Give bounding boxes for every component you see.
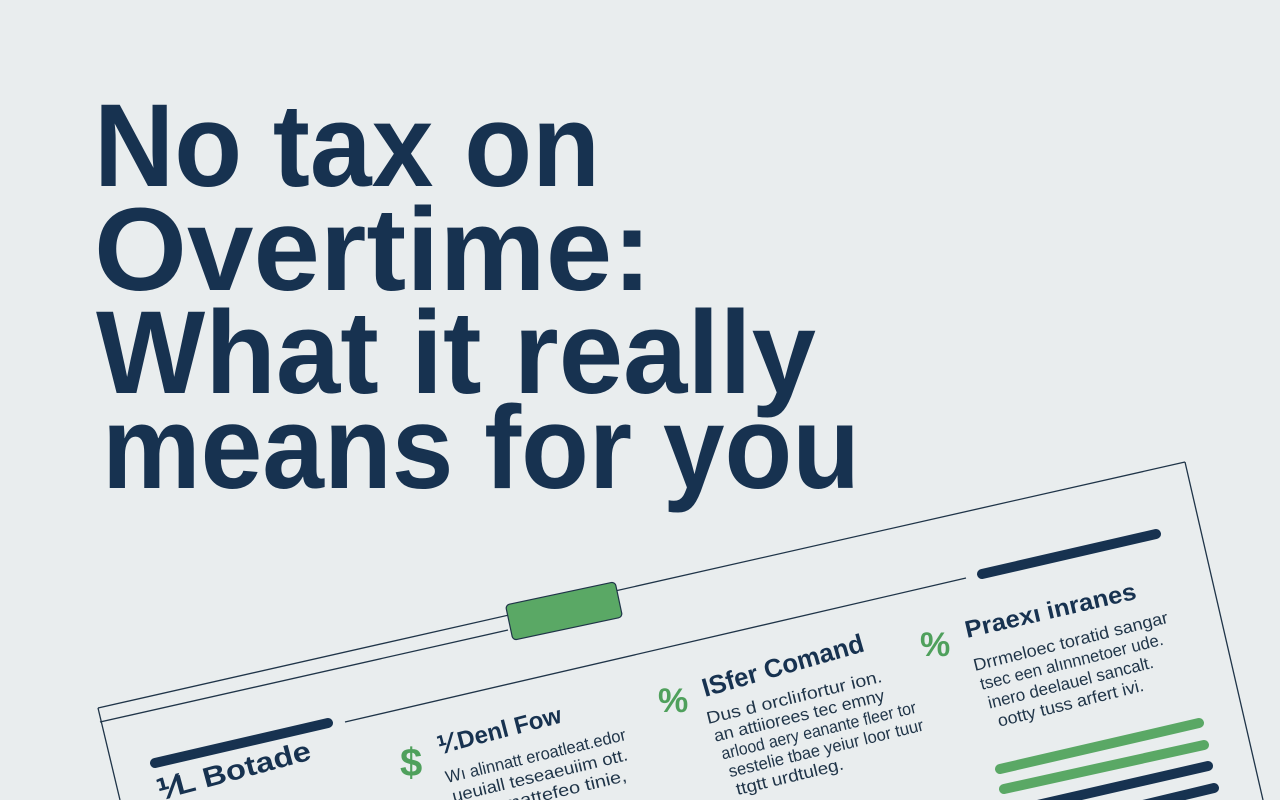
column 4: percent: % — [920, 626, 950, 664]
column 4: percent: inero deelauel sancalt. — [986, 653, 1155, 712]
column 3: percent: an attiiorees tec emny — [712, 686, 887, 746]
column 3: percent: Dus d orcliıfortur ion. — [704, 667, 884, 728]
column 3: percent — [658, 628, 930, 800]
column 2: dollar: Wı alinnatt eroatleat.edor — [443, 725, 628, 787]
column 3: percent: ttgtt urdtuleg. — [734, 755, 845, 799]
column 4: percent — [920, 578, 1185, 733]
column 2: dollar: ⅟.Denl Fow — [435, 702, 565, 760]
column 4: percent: ootty tuss arfert ivi. — [996, 676, 1146, 731]
green bars — [1000, 723, 1204, 789]
column 3: percent: sestelie tbae yeiur loor tuur — [727, 716, 926, 781]
title: means for you — [102, 382, 860, 514]
column 3: percent: % — [658, 682, 688, 720]
dark bars — [155, 534, 1214, 800]
column 3: percent: ISfer Comand — [698, 628, 867, 703]
title: Overtime: — [94, 184, 652, 316]
column 4: percent: Praexı inranes — [962, 578, 1139, 644]
green tab — [505, 582, 623, 640]
column 4: percent: tsec een alınnnetoer ude. — [978, 630, 1165, 694]
title — [94, 80, 860, 514]
panel: tilted card — [98, 462, 1263, 800]
title: No tax on — [94, 80, 600, 212]
column 2: dollar — [400, 702, 637, 800]
title: What it really — [96, 287, 816, 419]
column 2: dollar: $ — [400, 741, 422, 785]
column 4: percent: Drrmeloec toratid sangar — [971, 608, 1170, 675]
column 3: percent: arlood aery eanante fleer tor — [719, 698, 918, 763]
